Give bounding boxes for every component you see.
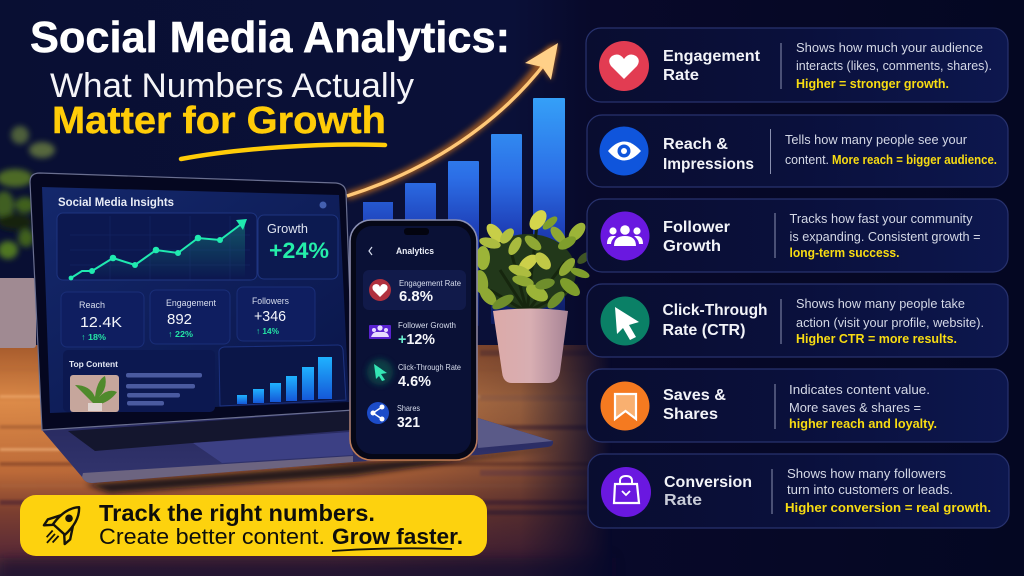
card description: More saves & shares = xyxy=(789,401,921,415)
card title xyxy=(663,219,730,255)
phone notch xyxy=(404,228,429,235)
icon: rocket xyxy=(36,497,90,553)
growth panel xyxy=(258,215,338,279)
laptop base xyxy=(42,405,553,483)
growth panel: Growth xyxy=(267,221,308,236)
phone screen xyxy=(356,226,471,454)
banner underline xyxy=(332,548,452,551)
card: saves and shares xyxy=(587,369,1008,442)
stat: reach: Reach xyxy=(79,300,105,310)
stat: followers xyxy=(237,287,315,341)
blurred plant and pot left xyxy=(0,126,55,348)
row: click-through rate: Click-Through Rate xyxy=(398,362,461,372)
top content panel xyxy=(63,350,215,412)
back chevron xyxy=(369,247,372,255)
card title: Saves & xyxy=(663,387,726,404)
laptop shadow xyxy=(85,447,560,493)
card description: interacts (likes, comments, shares). xyxy=(796,59,992,73)
row: engagement rate: Engagement Rate xyxy=(399,278,461,288)
card title: Shares xyxy=(663,406,718,423)
card: conversion rate xyxy=(588,454,1009,528)
banner line 2: Create better content. xyxy=(99,524,325,549)
card title: Follower xyxy=(663,219,730,236)
card title: Reach & xyxy=(663,136,728,153)
card title xyxy=(662,302,768,339)
card description xyxy=(796,297,984,346)
row: shares: Shares xyxy=(397,403,420,413)
card description: Shows how many followers xyxy=(787,467,946,481)
stat: followers: Followers xyxy=(252,296,289,306)
card description: Shows how many people take xyxy=(796,297,965,311)
wood table xyxy=(0,340,612,576)
card description xyxy=(790,212,980,260)
foliage xyxy=(472,207,593,312)
screen xyxy=(42,187,349,413)
icon: people xyxy=(600,212,650,260)
screen bezel xyxy=(30,173,354,430)
top content panel: Top Content xyxy=(69,359,118,369)
row: engagement rate xyxy=(363,270,466,310)
title line 2: What Numbers Actually xyxy=(50,67,414,105)
card title: Engagement xyxy=(663,48,761,65)
card description: Higher conversion = real growth. xyxy=(785,501,991,515)
keyboard xyxy=(68,411,351,451)
card description xyxy=(785,467,991,515)
title xyxy=(30,13,510,159)
card title xyxy=(663,48,761,84)
phone body xyxy=(350,220,477,460)
plant right xyxy=(472,207,593,383)
card description: Tracks how fast your community xyxy=(790,212,973,226)
card description: Tells how many people see your xyxy=(785,133,967,147)
stat: reach xyxy=(61,292,144,347)
pot xyxy=(493,308,568,383)
card description: Shows how much your audience xyxy=(796,41,983,55)
title line 1: Social Media Analytics: xyxy=(30,13,510,62)
card description: content. xyxy=(785,153,829,167)
icon: bookmark xyxy=(600,382,650,430)
card title xyxy=(664,474,752,509)
phone xyxy=(350,220,477,460)
icon: shopping bag xyxy=(601,467,651,517)
card description xyxy=(789,383,937,431)
card description: More reach = bigger audience. xyxy=(832,153,997,167)
growth arrow xyxy=(347,43,558,196)
card description xyxy=(796,41,992,91)
card title: Rate xyxy=(664,492,702,509)
card title: Click-Through xyxy=(662,302,768,319)
card: engagement rate xyxy=(586,28,1008,102)
stat: reach: ↑ 18% xyxy=(81,332,106,342)
card title: Rate xyxy=(663,67,699,84)
card title: Conversion xyxy=(664,474,752,491)
row: engagement rate: 6.8% xyxy=(399,288,433,305)
line chart xyxy=(57,213,257,280)
card description: action (visit your profile, website). xyxy=(796,316,984,330)
bar chart xyxy=(219,345,346,406)
screen heading: Social Media Insights xyxy=(58,195,174,209)
row: click-through rate: 4.6% xyxy=(398,373,431,390)
thumbnail xyxy=(70,375,119,412)
card description: long-term success. xyxy=(790,246,900,260)
card title: Rate (CTR) xyxy=(662,322,746,339)
row: shares xyxy=(367,402,420,431)
icon: heart xyxy=(599,41,649,91)
card description xyxy=(785,133,997,167)
card description: is expanding. Consistent growth = xyxy=(790,230,980,244)
settings dot xyxy=(320,202,326,208)
stat: followers: +346 xyxy=(254,308,286,325)
card title xyxy=(663,387,726,423)
laptop xyxy=(30,173,560,493)
card: reach and impressions xyxy=(587,115,1008,187)
stat: engagement: Engagement xyxy=(166,298,216,308)
row: click-through rate xyxy=(367,359,461,390)
card title: Growth xyxy=(663,238,721,255)
row: follower growth xyxy=(369,320,456,348)
card description: higher reach and loyalty. xyxy=(789,417,937,431)
row: follower growth: Follower Growth xyxy=(398,320,456,330)
card description: Indicates content value. xyxy=(789,383,930,397)
icon: cursor xyxy=(600,296,650,346)
stat: followers: ↑ 14% xyxy=(256,326,279,336)
card: click-through rate xyxy=(587,284,1008,357)
icon: eye xyxy=(600,126,648,176)
stat: engagement: ↑ 22% xyxy=(168,329,193,339)
title line 3: Matter for Growth xyxy=(52,100,386,142)
rising bars backdrop xyxy=(363,98,565,326)
card: follower growth xyxy=(587,199,1008,272)
card description: Higher CTR = more results. xyxy=(796,332,957,346)
title underline xyxy=(181,145,385,159)
row: shares: 321 xyxy=(397,414,420,431)
card title xyxy=(663,136,754,173)
right base highlight xyxy=(478,418,553,448)
stat: reach: 12.4K xyxy=(80,314,122,331)
row: follower growth: +12% xyxy=(398,331,435,348)
card title: Impressions xyxy=(663,156,754,173)
stat: engagement xyxy=(150,290,230,344)
phone header: Analytics xyxy=(396,246,434,257)
base front lip xyxy=(82,456,353,483)
stat: engagement: 892 xyxy=(167,311,192,328)
banner line 1: Track the right numbers. xyxy=(99,500,375,526)
growth panel: +24% xyxy=(269,238,329,263)
trackpad xyxy=(193,432,353,463)
card description: Higher = stronger growth. xyxy=(796,77,949,91)
banner emphasis: Grow faster. xyxy=(332,524,463,549)
bottom banner xyxy=(20,495,487,556)
card description: turn into customers or leads. xyxy=(787,483,953,497)
